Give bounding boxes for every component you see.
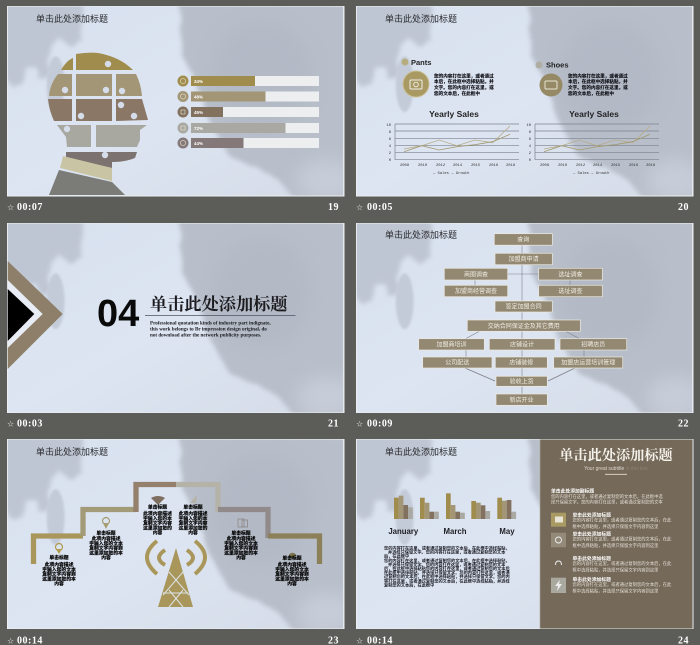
flow boxes: 查询 bbox=[517, 236, 529, 244]
title: slide 23: 单击此处添加标题 bbox=[36, 446, 108, 457]
flow boxes: 加盟商申请 bbox=[509, 255, 539, 263]
text block: slide 24 paragraph bbox=[384, 544, 510, 588]
panel: slide 20 sales charts bbox=[352, 2, 700, 202]
shoes block: 您的内容打在这里，或者通过 bbox=[568, 72, 628, 80]
footer: slide 22: 00:09 bbox=[367, 418, 393, 430]
footer: slide 20: 00:05 bbox=[367, 202, 393, 213]
callout: step 2 bbox=[89, 518, 123, 561]
callout: step 3: 内容 bbox=[153, 529, 162, 536]
line chart: yearly sales right: 0 bbox=[529, 159, 532, 163]
footer: slide 24 bbox=[356, 636, 689, 645]
line chart: yearly sales right: 4 bbox=[529, 145, 532, 149]
bar chart: monthly bbox=[388, 493, 516, 536]
callout: step 3: 字输入您的本 bbox=[143, 515, 172, 522]
sidebar intro text: 单击此处添加副标题 bbox=[551, 488, 594, 494]
list item 2: 框中选择粘贴，并选择只保留文字内容到这里 bbox=[572, 542, 659, 549]
footer: slide 22: 22 bbox=[678, 418, 689, 430]
line chart: yearly sales left: 0 bbox=[389, 159, 392, 163]
line chart: yearly sales left: 2012 bbox=[436, 164, 446, 168]
line chart: yearly sales left: 8 bbox=[389, 131, 392, 135]
line chart: yearly sales right: 2014 bbox=[593, 164, 603, 168]
pants block: 您的内容打在这里，或者通过 bbox=[434, 72, 494, 80]
pants block: 本后，在此框中选择粘贴，并 bbox=[434, 78, 494, 85]
line chart: yearly sales left: 4 bbox=[389, 145, 392, 149]
bar chart: progress bars: 48% bbox=[194, 94, 203, 100]
text block: slide 24 paragraph: 后，在此框中 bbox=[384, 553, 409, 560]
flow boxes: 店铺设计 bbox=[510, 341, 534, 349]
head silhouette puzzle bbox=[48, 53, 148, 195]
callout: step 4: 字输入您的本 bbox=[179, 515, 208, 522]
line chart: yearly sales left: 2015 bbox=[471, 164, 481, 168]
bar chart: monthly: January bbox=[388, 527, 419, 536]
flow boxes: 公司配送 bbox=[445, 359, 469, 367]
line chart: yearly sales right: 2016 bbox=[629, 164, 639, 168]
shoes block: 您的文本后，在此框中 bbox=[568, 90, 614, 97]
list item 1 bbox=[551, 512, 672, 530]
line chart: yearly sales left: 2014 bbox=[453, 164, 463, 168]
pants block: 文字。您的内容打在这里，或 bbox=[434, 84, 494, 91]
callout: step 1: 此项内容描述 bbox=[45, 561, 74, 568]
line chart: yearly sales left: — Sales — Growth bbox=[432, 171, 469, 176]
callout: step 2: 单击标题 bbox=[96, 530, 116, 536]
list item 4 bbox=[551, 576, 672, 594]
flow boxes: 验收上货 bbox=[510, 378, 534, 386]
flow connectors bbox=[465, 245, 584, 394]
flow boxes: 新店开业 bbox=[510, 396, 534, 404]
line chart: yearly sales right: 2018 bbox=[646, 164, 656, 168]
bar chart: progress bars: 44% bbox=[194, 141, 203, 146]
callout: step 4 bbox=[179, 495, 208, 536]
flow boxes: 商圈调查 bbox=[464, 270, 488, 278]
callout: step 5 bbox=[224, 519, 258, 561]
callout: step 4: 这里添加您的 bbox=[179, 524, 208, 531]
callout: step 1: 字输入您的文本 bbox=[42, 566, 76, 573]
flow boxes: 交纳合同保证金及其它费用 bbox=[488, 322, 560, 330]
text block: slide 24 paragraph: 过复制您的文本后，在此框中选择粘贴，并选择只保留文字。您的内 bbox=[384, 573, 510, 580]
text block: slide 24 paragraph: 在此框中选择粘贴，并选择只保留文字。您的内容打在这里，或者通 bbox=[384, 569, 510, 576]
footer: slide 19: 19 bbox=[328, 202, 339, 213]
flow boxes: 加盟商经营调查 bbox=[455, 287, 497, 295]
title: slide 24: 单击此处添加标题 bbox=[385, 446, 457, 457]
line chart: yearly sales left: 2018 bbox=[506, 164, 516, 168]
footer: slide 22 bbox=[356, 418, 689, 430]
line chart: yearly sales right: 2008 bbox=[540, 164, 550, 168]
callout: step 5: 此项内容描述 bbox=[227, 535, 256, 542]
list item 2: 单击此处添加标题 bbox=[572, 530, 611, 538]
section number: 04 bbox=[97, 293, 139, 335]
text block: slide 21 description: Professional quotation kinds of industry part indignate, bbox=[150, 320, 271, 326]
text block: slide 24 paragraph: 并选择只保留文字。您的内容打在这里，或者通过复制您的文本 bbox=[388, 549, 506, 556]
callout: step 1: 单击标题 bbox=[49, 554, 69, 561]
title: slide 20: 单击此处添加标题 bbox=[385, 13, 457, 24]
text block: slide 21 description bbox=[150, 320, 271, 338]
text block: slide 24 paragraph: 您的内容打在这里，或者通过复制您的文本后，在此框中选择粘贴， bbox=[384, 557, 510, 564]
list item 3: 单击此处添加标题 bbox=[572, 555, 611, 562]
callout: step 1: 复制文字内容到 bbox=[42, 571, 76, 578]
sidebar heading: 单击此处添加标题 bbox=[559, 447, 674, 464]
callout: step 6 bbox=[275, 553, 309, 587]
callout: step 6: 单击标题 bbox=[282, 554, 302, 562]
panel: slide 21 section divider bbox=[3, 219, 356, 419]
line chart: yearly sales right: 2010 bbox=[558, 164, 568, 168]
line chart: yearly sales right: — Sales — Growth bbox=[572, 171, 609, 176]
footer: slide 20 bbox=[356, 202, 689, 213]
footer: slide 19 bbox=[7, 202, 339, 213]
flow boxes: 选址调查 bbox=[558, 270, 583, 278]
panel: slide 24 bars and brown sidebar bbox=[352, 435, 700, 635]
callout: step 1 bbox=[42, 544, 76, 587]
footer: slide 20: 20 bbox=[678, 202, 689, 213]
footer: slide 19: ☆ bbox=[7, 203, 14, 212]
line chart: yearly sales right: 2 bbox=[529, 152, 532, 156]
callout: step 5: 内容 bbox=[236, 554, 246, 561]
callout: step 5: 复制文字内容到 bbox=[224, 545, 258, 552]
callout: step 2: 复制文字内容到 bbox=[89, 545, 123, 552]
callout: step 4: 单击标题 bbox=[183, 504, 203, 510]
sidebar intro text: 择只保留文字。您的内容打在这里，或者通过复制您的文本 bbox=[551, 498, 663, 506]
callout: step 2: 内容 bbox=[101, 554, 111, 561]
callout: step 4: 复制文字内容 bbox=[179, 520, 208, 527]
heading: slide 21: 单击此处添加标题 bbox=[150, 294, 288, 314]
bar chart: progress bars: 45% bbox=[194, 110, 203, 115]
callout: step 6: 内容 bbox=[287, 580, 297, 587]
list item 3: 您的内容打在这里，或者通过复制您的文本后，在此 bbox=[572, 560, 672, 567]
bar chart: monthly: May bbox=[499, 527, 515, 536]
panel: slide 22 flow chart bbox=[352, 219, 700, 419]
callout: step 6: 这里添加您的本 bbox=[275, 575, 309, 582]
callout: step 5: 单击标题 bbox=[231, 530, 251, 536]
footer: slide 21: 00:03 bbox=[17, 418, 43, 430]
list item 4: 您的内容打在这里，或者通过复制您的文本后，在此 bbox=[572, 581, 672, 588]
panel: brown sidebar bbox=[540, 440, 692, 628]
callout: step 3 bbox=[143, 496, 172, 536]
pants block: Pants bbox=[411, 58, 431, 67]
line chart: yearly sales left: 2010 bbox=[418, 164, 428, 168]
shoes block: 文字。您的内容打在这里，或 bbox=[568, 84, 628, 91]
bar chart: progress bars: 72% bbox=[194, 126, 203, 131]
panel: slide 23 staircase with tower bbox=[3, 435, 356, 635]
footer: slide 23 bbox=[7, 636, 339, 645]
line chart: yearly sales right: 2012 bbox=[576, 164, 586, 168]
line chart: yearly sales left: 10 bbox=[386, 124, 392, 128]
list item 1: 框中选择粘贴，并选择只保留文字内容到这里 bbox=[572, 523, 659, 530]
callout: step 6: 此项内容描述 bbox=[278, 561, 307, 568]
list item 2: 您的内容打在这里，或者通过复制您的文本后，在此 bbox=[572, 536, 672, 542]
text block: slide 21 description: not download after the network publicity purposes. bbox=[150, 332, 262, 338]
text block: slide 24 paragraph: 您的内容打在这里，或者通过复制您的文本后，在此框中选择粘贴， bbox=[384, 544, 510, 552]
footer: slide 21: ☆ bbox=[7, 420, 14, 428]
line chart: yearly sales left: 2016 bbox=[489, 164, 499, 168]
shoes block: 本后，在此框中选择粘贴，并 bbox=[568, 78, 628, 85]
footer: slide 20: ☆ bbox=[356, 203, 363, 212]
callout: step 3: 此项内容描述 bbox=[143, 510, 172, 517]
callout: step 5: 这里添加您的本 bbox=[224, 549, 258, 556]
callout: step 2: 这里添加您的本 bbox=[89, 549, 123, 556]
sidebar intro text bbox=[551, 488, 663, 506]
footer: slide 21: 21 bbox=[328, 418, 339, 430]
bar chart: progress bars bbox=[178, 76, 319, 148]
footer: slide 21 bbox=[7, 418, 339, 430]
sidebar subtitle: Your great subtitle in this line bbox=[584, 466, 648, 472]
line chart: yearly sales left bbox=[386, 109, 519, 176]
callout: step 1: 内容 bbox=[54, 580, 64, 587]
flow boxes: 店铺装修 bbox=[509, 359, 533, 367]
list item 3 bbox=[556, 555, 672, 574]
sidebar intro text: 您的内容打在这里，或者通过复制您的文本后，在此框中选 bbox=[551, 493, 663, 500]
line chart: yearly sales right: Yearly Sales bbox=[569, 109, 619, 119]
line chart: yearly sales right: 2015 bbox=[611, 164, 621, 168]
title: slide 22: 单击此处添加标题 bbox=[385, 229, 457, 240]
callout: step 2: 此项内容描述 bbox=[92, 535, 121, 542]
line chart: yearly sales right: 10 bbox=[526, 124, 532, 128]
shoes block bbox=[536, 60, 628, 97]
text block: slide 21 description: this work belongs to Br impression design original, do bbox=[150, 326, 267, 332]
callout: step 4: 此项内容描述 bbox=[179, 510, 208, 517]
text block: slide 24 paragraph: 复制您的文本后，在此框中 bbox=[384, 581, 434, 588]
panel: slide 19 head and bars bbox=[3, 2, 356, 202]
staircase connector bbox=[34, 484, 320, 564]
flow boxes: 签定加盟合同 bbox=[506, 303, 542, 311]
list item 4: 单击此处添加标题 bbox=[572, 576, 611, 583]
callout: step 1: 这里添加您的本 bbox=[42, 575, 76, 582]
line chart: yearly sales left: 2008 bbox=[400, 164, 410, 168]
callout: step 3: 这里添加您的 bbox=[143, 524, 172, 531]
text block: slide 24 paragraph: 并选择只保留文字。您的内容打在这里，或者通过复制您的文本 bbox=[388, 561, 506, 568]
flow boxes: 选址调查 bbox=[558, 287, 583, 295]
line chart: yearly sales right: 8 bbox=[529, 131, 532, 135]
list item 3: 框中选择粘贴，并选择只保留文字内容到这里 bbox=[572, 566, 659, 574]
flow boxes bbox=[419, 234, 627, 405]
line chart: yearly sales left: 2 bbox=[389, 152, 392, 156]
flow boxes: 加盟店运营培训管理 bbox=[561, 359, 615, 367]
list item 2 bbox=[551, 530, 672, 549]
line chart: yearly sales left: 6 bbox=[389, 138, 392, 142]
callout: step 4: 内容 bbox=[188, 529, 198, 536]
pants block: 您的文本后，在此框中 bbox=[434, 90, 480, 97]
callout: step 6: 复制文字内容到 bbox=[275, 571, 309, 578]
callout: step 5: 字输入您的文本 bbox=[224, 540, 258, 547]
flow boxes: 加盟商培训 bbox=[436, 341, 467, 349]
text block: slide 24 paragraph: 后，在此框中选择粘贴您的内容打在这里，或者通过复制您的文本后 bbox=[384, 565, 510, 572]
bar chart: monthly: March bbox=[444, 527, 467, 536]
list item 4: 框中选择粘贴，并选择只保留文字内容到这里 bbox=[572, 588, 659, 594]
flow boxes: 招聘店员 bbox=[581, 341, 605, 349]
pants block bbox=[402, 58, 494, 97]
callout: step 6: 字输入您的文本 bbox=[275, 566, 309, 573]
bar chart: progress bars: 34% bbox=[194, 79, 203, 84]
line chart: yearly sales right: 6 bbox=[529, 138, 532, 142]
text block: slide 24 paragraph: 容打在这里，或者通过复制您的文本后，在此框中选择粘贴，并选择 bbox=[384, 577, 510, 584]
icon: signal tower bbox=[147, 541, 205, 607]
callout: step 2: 字输入您的文本 bbox=[89, 540, 123, 547]
footer: slide 22: ☆ bbox=[356, 420, 363, 428]
footer: slide 19: 00:07 bbox=[17, 202, 43, 213]
line chart: yearly sales right bbox=[526, 109, 659, 176]
list item 1: 单击此处添加标题 bbox=[572, 512, 611, 518]
title: slide 19: 单击此处添加标题 bbox=[36, 13, 108, 24]
shoes block: Shoes bbox=[546, 60, 569, 70]
icon: chevron arrow bbox=[8, 261, 63, 369]
list item 1: 您的内容打在这里，或者通过复制您的文本后，在此 bbox=[572, 516, 672, 524]
line chart: yearly sales left: Yearly Sales bbox=[429, 109, 479, 119]
callout: step 3: 单击标题 bbox=[148, 504, 167, 510]
callout: step 3: 复制文字内容 bbox=[143, 520, 172, 527]
